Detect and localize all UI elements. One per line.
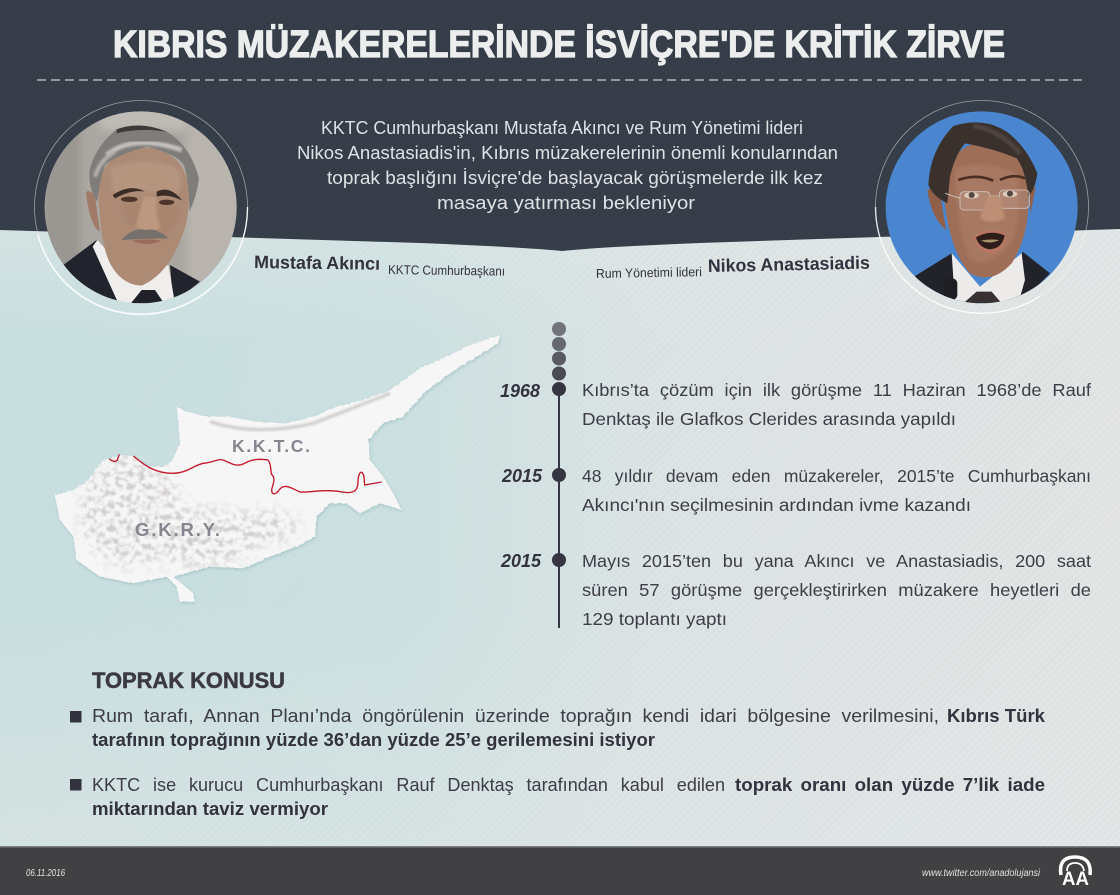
intro text: masaya yatırması bekleniyor	[437, 193, 695, 213]
portrait: Mustafa Akıncı	[43, 107, 240, 307]
bullet 1: Rum tarafı, Annan Planı’nda öngörülenin üzerinde toprağın kendi idari bölgesine verilmesini,	[92, 705, 939, 726]
logo: Anadolu Agency: AA	[1062, 869, 1089, 890]
bullet 1: Kıbrıs Türk	[947, 705, 1046, 726]
entry 2015 first: Akıncı'nın seçilmesinin ardından ivme kazandı	[582, 495, 971, 515]
logo: Anadolu Agency	[1061, 857, 1090, 890]
border line	[109, 454, 382, 494]
entry 2015 second	[500, 551, 1091, 629]
entry 1968: Kıbrıs’ta çözüm için ilk görüşme 11 Haziran 1968’de Rauf	[582, 380, 1091, 400]
header band	[0, 0, 1120, 251]
map label: K.K.T.C.: K.K.T.C.	[232, 436, 310, 456]
entry 2015 second: Mayıs 2015’ten bu yana Akıncı ve Anastasiadis, 200 saat	[582, 551, 1091, 571]
entry 2015 first: 2015	[501, 466, 543, 486]
map label: G.K.R.Y.: G.K.R.Y.	[135, 519, 220, 540]
title: KIBRIS MÜZAKERELERİNDE İSVİÇRE'DE KRİTİK ZİRVE	[113, 23, 1005, 66]
bullet 1	[70, 705, 1046, 750]
bullet 2: miktarından taviz vermiyor	[92, 798, 328, 819]
bullet 2: toprak oranı olan yüzde 7’lik iade	[735, 774, 1045, 795]
entry 2015 second: 129 toplantı yaptı	[582, 609, 727, 629]
caption: Nikos Anastasiadis: Rum Yönetimi lideri	[596, 264, 702, 281]
footer url: www.twitter.com/anadolujansi	[922, 868, 1041, 879]
bullet 1: tarafının toprağının yüzde 36’dan yüzde 25’e gerilemesini istiyor	[92, 729, 655, 750]
entry 2015 first	[501, 466, 1091, 515]
portrait ring: Nikos Anastasiadis	[876, 100, 1088, 314]
intro text: toprak başlığını İsviçre'de başlayacak görüşmelerde ilk kez	[327, 168, 823, 188]
caption: Mustafa Akıncı: KKTC Cumhurbaşkanı	[388, 262, 505, 279]
caption: Nikos Anastasiadis: Nikos Anastasiadis	[708, 253, 870, 276]
mountain relief	[80, 393, 390, 567]
intro text: KKTC Cumhurbaşkanı Mustafa Akıncı ve Rum Yönetimi lideri	[321, 118, 803, 138]
entry 1968: 1968	[500, 381, 540, 401]
timeline	[500, 322, 1091, 629]
intro text	[297, 118, 838, 213]
dashed divider	[37, 79, 1085, 81]
footer bar	[0, 846, 1120, 895]
bullet 2	[70, 774, 1045, 819]
caption: Mustafa Akıncı	[254, 252, 505, 279]
entry 2015 second: 2015	[500, 551, 542, 571]
portrait: Nikos Anastasiadis	[883, 110, 1080, 307]
caption: Mustafa Akıncı: Mustafa Akıncı	[254, 252, 380, 274]
entry 2015 second: süren 57 görüşme gerçekleştirirken müzakere heyetleri de	[582, 580, 1091, 600]
entry 2015 first: 48 yıldır devam eden müzakereler, 2015’te Cumhurbaşkanı	[582, 466, 1091, 486]
heading: Toprak Konusu: TOPRAK KONUSU	[92, 668, 285, 693]
map: Cyprus	[50, 335, 500, 602]
entry 1968	[500, 380, 1091, 429]
island shape	[50, 335, 500, 602]
footer date: 06.11.2016	[26, 868, 65, 879]
intro text: Nikos Anastasiadis'in, Kıbrıs müzakerelerinin önemli konularından	[297, 143, 838, 163]
bullet 2: KKTC ise kurucu Cumhurbaşkanı Rauf Denktaş tarafından kabul edilen	[92, 774, 725, 795]
entry 1968: Denktaş ile Glafkos Clerides arasında yapıldı	[582, 409, 956, 429]
caption: Nikos Anastasiadis	[596, 253, 870, 281]
portrait ring: Mustafa Akıncı	[34, 100, 248, 314]
